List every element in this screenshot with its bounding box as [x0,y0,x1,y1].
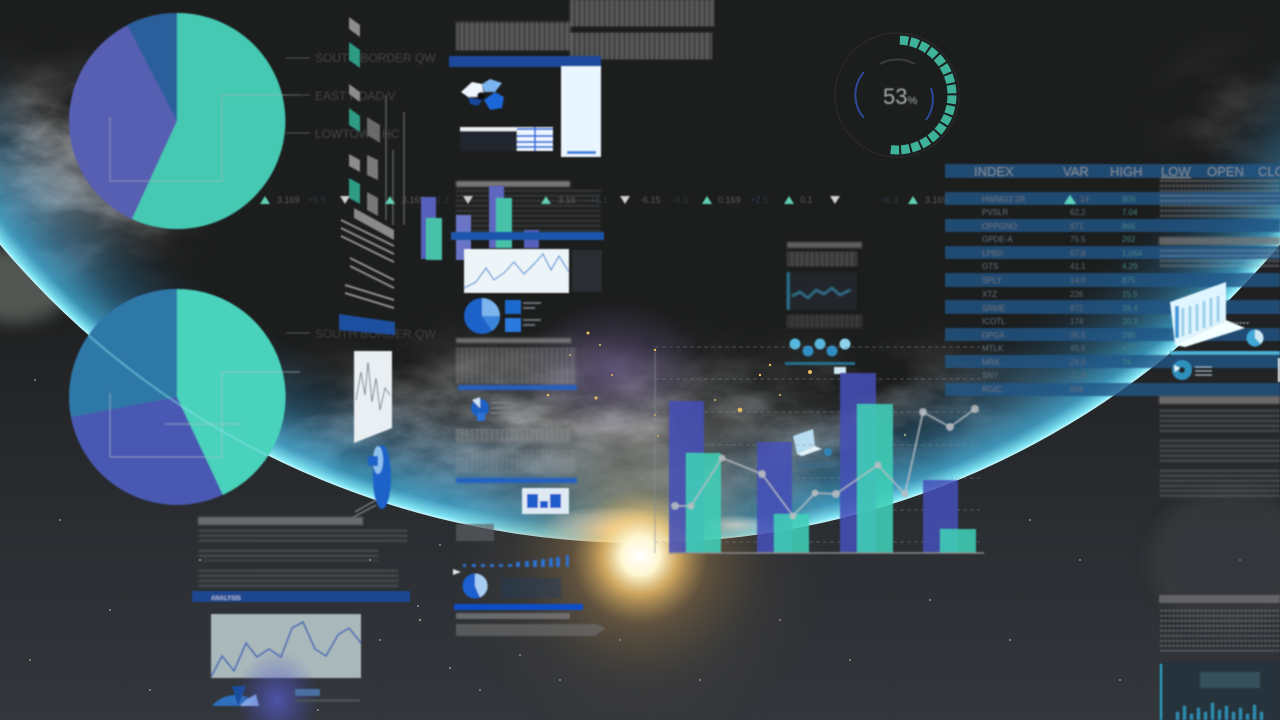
fan chart and lens flare [212,650,360,720]
chart label: bottom pie: SOUTH BORDER QW [315,327,436,341]
high column: 7.04 [1122,208,1138,217]
index column: PVSLR [982,208,1008,217]
small laptop icon on globe [793,429,837,468]
stock table [945,164,1280,396]
ticker down arrows [340,196,840,204]
rising mini bars [463,555,569,567]
overlay line series [671,405,979,520]
laptop icon [1170,282,1245,347]
teal segmented arc [839,37,955,153]
city lights [547,332,906,437]
radial blue satellite icon [352,445,391,518]
chart labels: top pie [315,51,436,141]
var column: 872 [1070,304,1084,313]
index column: XTZ [982,290,997,299]
ticker values [277,195,948,205]
gauge: 53 percent [835,33,959,157]
table rows [945,164,1280,396]
earth clouds lit region [348,366,840,507]
table header text: INDEX [974,164,1014,179]
ticker secondary values: +6.3 [880,195,898,205]
pie widget: blue [464,298,541,334]
line chart panel: white [464,249,569,293]
var column: 67.8 [1070,249,1086,258]
text block: top centre grey paragraph [456,22,571,50]
var column: 24.0 [1070,358,1086,367]
ticker secondary values: +1.1 [590,195,608,205]
nebula haze [0,247,1280,630]
var column: 75.5 [1070,235,1086,244]
var column: 871 [1070,222,1084,231]
pie chart: top [69,13,310,229]
small background bar chart [421,186,539,260]
high column: 74 [1122,358,1131,367]
index column: LPBD [982,249,1003,258]
ticker values: 3.169 [402,195,425,205]
aurora purple glow [542,309,695,428]
grey panel with mini line: centre right [787,242,862,328]
index column: ICOTL [982,317,1006,326]
var column: 21.6 [1070,371,1086,380]
high column: 29.4 [1122,304,1138,313]
small pie [462,574,488,598]
white seismograph panel [354,351,392,443]
white mini bars tile [522,488,569,514]
var column: 14.6 [1070,276,1086,285]
high column: 475 [1122,344,1136,353]
ticker values: -6.15 [640,195,661,205]
analysis header bar: ANALYSIS [211,596,241,602]
earth globe [0,55,1280,542]
ticker strip [260,195,948,205]
ticker secondary values: +2.5 [750,195,768,205]
var column: 41.1 [1070,262,1086,271]
rim atmosphere [0,71,1280,542]
index column: GPDE-A [982,235,1013,244]
high column: 286 [1122,331,1136,340]
mini table widget [460,127,553,151]
bottom centre widgets [453,524,606,636]
globe limb through pie [88,334,268,456]
blue header bar: line chart [451,232,604,240]
table header text: LOW [1161,164,1191,179]
table header text: OPEN [1207,164,1244,179]
high column: 1.064 [1122,249,1143,258]
gauge value: 53% [883,84,917,109]
high column: 20.3 [1122,317,1138,326]
limb cloud bands, left [0,107,156,269]
high column: 866 [1122,222,1136,231]
teal series bars [686,404,976,553]
starfield [29,379,1241,711]
high column: 809 [1122,195,1136,204]
white tall panel [561,66,601,157]
index column [982,195,1025,394]
cloud texture [0,58,1280,534]
ticker secondary values: +5.9 [308,195,326,205]
skewed column of small panels [349,17,404,225]
var column: 62.2 [1070,208,1086,217]
pie chart: bottom [68,288,310,506]
var column [1070,195,1089,394]
index column: OPPGNO [982,222,1017,231]
var column: 604 [1070,385,1084,394]
high column: 262 [1122,235,1136,244]
sun flare [450,366,830,720]
chart labels: top pie: SOUTH BORDER QW [315,51,436,65]
high column: 875 [1122,276,1136,285]
bottom right dashboard [1159,595,1280,720]
table header text: VAR [1063,164,1089,179]
index column: HWMG3 2R [982,195,1025,204]
var column: 35.5 [1070,331,1086,340]
table header text: HIGH [1110,164,1142,179]
ticker values: 3.169 [925,195,948,205]
high column: 15.5 [1122,290,1138,299]
chart labels: top pie: LOWTOWN HC [315,127,400,141]
index column: DPGA [982,331,1005,340]
ticker values: 0.169 [718,195,741,205]
ticker secondary values: -2.3 [433,195,449,205]
main bar chart [655,352,984,553]
text panel: far right lower [1159,396,1280,500]
teal divider and radial icon [1170,351,1280,382]
index column: GTS [982,262,998,271]
skewed text panel [339,208,395,335]
var column: 14 [1080,195,1089,204]
small pie on right [1215,323,1264,346]
ticker values: 0.1 [800,195,813,205]
ticker triangles [260,196,918,204]
donut widget [461,79,504,110]
ticker values: 3.169 [277,195,300,205]
ticker values: 3.16 [558,195,576,205]
limb cloud bands, right [960,375,1106,430]
high column: 4.29 [1122,262,1138,271]
chart labels: top pie: EAST ROAD V [315,89,395,103]
y axis [654,352,656,553]
text block: top right grey paragraph [570,0,715,59]
baseline [669,552,984,554]
grey text block behind bars [456,181,601,232]
text block: lower left paragraphs [198,517,408,587]
table header text [974,164,1280,179]
hexagon row icon [785,338,855,374]
index column: SRME [982,304,1005,313]
blue report header bar [449,56,601,67]
ticker secondary values: -0.3 [672,195,688,205]
index column: MTLK [982,344,1004,353]
purple series bars [669,373,958,553]
small blue gauge widget [471,397,511,421]
analysis header bar [192,591,410,602]
index column: SPLY [982,276,1003,285]
index column: SNY [982,371,999,380]
high column [1122,195,1143,367]
index column: MRK [982,358,1000,367]
dashed axis lines [655,347,980,542]
text block: middle grey [456,338,577,390]
line chart panel: lower left [211,614,361,678]
ticker secondary values [308,195,898,205]
text block: lower middle [456,428,577,483]
text panel: far right top [1159,180,1280,267]
var column: 226 [1070,290,1084,299]
bright cloud at horizon [544,508,668,542]
inner arcs [855,72,933,120]
index column: RGIC [982,385,1002,394]
var column: 45.6 [1070,344,1086,353]
grey side panel [572,250,602,292]
var column: 174 [1070,317,1084,326]
